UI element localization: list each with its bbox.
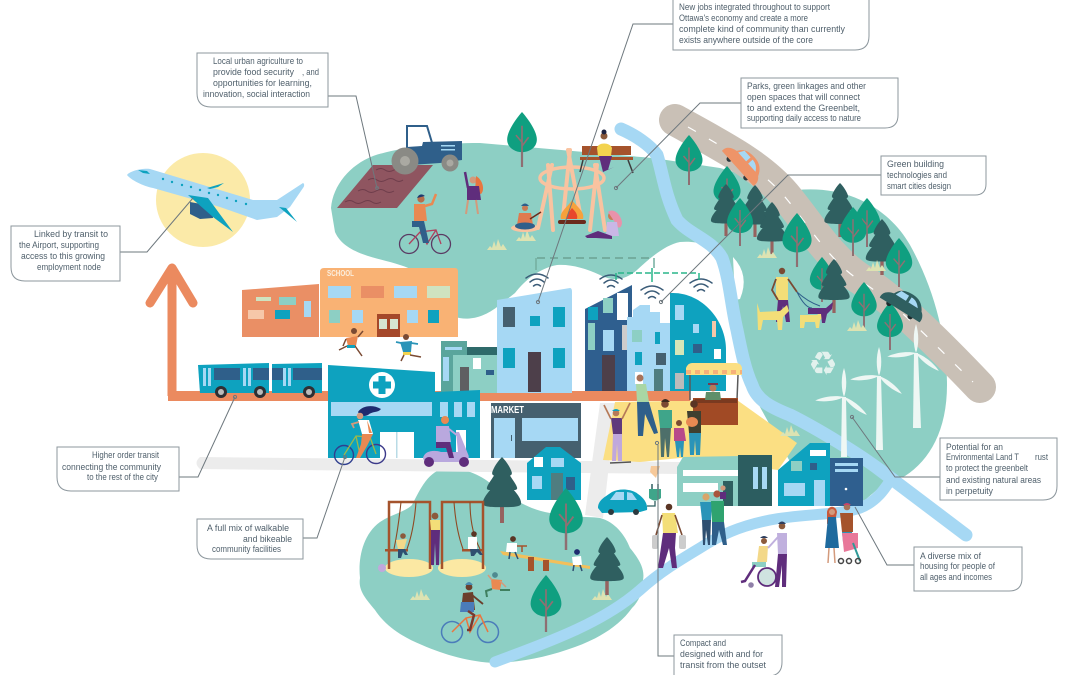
person: wheelchair user and helper (741, 522, 787, 588)
wind turbines (815, 324, 940, 457)
panel: green land upper (331, 143, 947, 505)
building: teal terrace (677, 455, 772, 506)
person: adult at swings (430, 513, 440, 565)
callout: transit: Higher order transit (92, 450, 159, 460)
leader: green building (659, 175, 881, 304)
trees in park (483, 457, 624, 632)
buses (198, 363, 322, 398)
callout: agriculture (197, 53, 328, 107)
callout: land trust: Potential for an (946, 442, 1003, 452)
river: lower (495, 478, 892, 662)
building: stepped tower (627, 305, 670, 391)
building: low teal block (441, 341, 497, 393)
callout: transit: to the rest of the city (87, 472, 159, 482)
callout: transit (57, 447, 179, 491)
callout: new jobs: exists anywhere outside of the core (679, 35, 813, 45)
icon: wood frame structure (538, 150, 605, 230)
callout: housing: all ages and incomes (920, 572, 993, 582)
building: dark blue tower (585, 285, 632, 391)
callout: agriculture: Local urban agriculture to (213, 56, 303, 66)
road: local street (196, 403, 680, 518)
leader: facilities (303, 455, 347, 538)
callout: parks: Parks, green linkages and other (747, 81, 866, 91)
building: blue gable house (778, 443, 863, 506)
callout: new jobs: complete kind of community than currently (679, 24, 846, 34)
callout: parks: open spaces that will connect (747, 92, 861, 102)
callout: airport: Linked by transit to (34, 229, 108, 239)
icon: campfire (560, 200, 584, 222)
icon: medical cross (369, 372, 395, 398)
sun (156, 153, 250, 247)
person: woman waving (465, 172, 483, 214)
white clearing sliver (733, 257, 744, 300)
icon: dark car on road (878, 280, 930, 325)
icon: tractor (392, 126, 462, 174)
callout: agriculture: opportunities for learning, (213, 78, 312, 88)
callout: land trust: to protect the greenbelt (946, 463, 1028, 473)
person: cyclist in park (442, 582, 498, 642)
callout: agriculture: innovation, social interaction (203, 89, 310, 99)
callout: facilities: and bikeable (243, 534, 292, 544)
person: scooter rider (423, 416, 469, 467)
school sign: SCHOOL (327, 269, 354, 278)
callout: parks: to and extend the Greenbelt, (747, 103, 860, 113)
callout: land trust: Environmental Land T (946, 452, 1020, 462)
person: dog walker (757, 268, 833, 330)
callout: housing (914, 547, 1022, 591)
callout: land trust (940, 438, 1057, 500)
callout: land trust: in perpetuity (946, 486, 994, 496)
callout: housing: housing for people of (920, 561, 996, 571)
icon: recycling symbol: ♻ (808, 344, 838, 383)
leader: transit (179, 395, 237, 477)
wi-fi signals (526, 274, 712, 298)
icon: airplane (127, 169, 304, 232)
person: sitting woman (585, 210, 622, 239)
person: couple with child (700, 485, 727, 545)
road: highway (675, 120, 980, 387)
callout: new jobs (673, 0, 869, 50)
plaza: yellow market square (603, 400, 797, 470)
callout: facilities: A full mix of walkable (207, 523, 289, 533)
callout: agriculture: , and (302, 67, 319, 77)
building: light blue tower (497, 288, 572, 393)
market stall (686, 363, 742, 425)
leader: land trust (850, 415, 940, 477)
grass tufts (410, 230, 886, 600)
callout: housing: A diverse mix of (920, 551, 982, 561)
person: running children (339, 328, 421, 361)
person: family at market (658, 399, 701, 457)
callout: new jobs: Ottawa's economy and create a more (679, 13, 808, 23)
callout: green building: technologies and (887, 170, 947, 180)
person: running child in park (486, 572, 510, 597)
leader: airport (120, 198, 193, 252)
callout: green building (881, 156, 986, 195)
person: cyclist at clinic (334, 406, 386, 464)
callout: green building: Green building (887, 159, 944, 169)
building: school (242, 268, 458, 337)
building: clinic (328, 365, 480, 458)
callout: airport (11, 226, 120, 281)
icon: bench with reader (580, 130, 633, 173)
leader: new jobs (536, 24, 673, 304)
callout: compact transit: Compact and (680, 638, 726, 648)
callout: land trust: and existing natural areas (946, 475, 1042, 485)
leader: agriculture (328, 96, 378, 189)
callout: green building: smart cities design (887, 181, 951, 191)
leader: compact transit (655, 441, 674, 656)
callout: agriculture: provide food security (213, 67, 295, 77)
field (337, 165, 433, 208)
building: market (491, 403, 581, 458)
person: guitar player (511, 204, 541, 232)
person: cyclist in field (400, 194, 450, 254)
callout: parks (741, 78, 898, 128)
callout: facilities (197, 519, 303, 559)
trees (507, 112, 912, 350)
panel: green park lower (360, 468, 643, 663)
callout: parks: supporting daily access to nature (747, 113, 861, 123)
network links dashed (536, 258, 699, 282)
person: couple with stroller (825, 503, 860, 564)
arrow: transit line (150, 268, 690, 396)
callout: transit: connecting the community (62, 462, 162, 472)
callout: compact transit: transit from the outset (680, 660, 767, 670)
river: upper (621, 129, 966, 535)
callout: new jobs: New jobs integrated throughout to support (679, 2, 831, 12)
playground swings (378, 502, 486, 577)
callout: airport: the Airport, supporting (19, 240, 99, 250)
callout: airport: access to this growing (21, 251, 105, 261)
callout: compact transit: designed with and for (680, 649, 763, 659)
person: shopper with bags (652, 504, 686, 568)
dogs (757, 303, 824, 330)
callout: land trust: rust (1035, 452, 1048, 462)
person: skateboarder (604, 403, 631, 463)
building: small blue house (527, 447, 581, 500)
seesaw with children (500, 536, 590, 571)
leader: housing (855, 507, 914, 565)
market sign: MARKET (491, 405, 524, 416)
callout: facilities: community facilities (212, 544, 282, 554)
person: market man (636, 374, 658, 436)
icon: orange car on road (720, 137, 768, 188)
leader: parks (614, 103, 741, 190)
icon: e-car with charger (598, 466, 661, 515)
building: domed tower (670, 293, 726, 391)
callout: airport: employment node (37, 262, 101, 272)
callout: compact transit (674, 635, 782, 675)
